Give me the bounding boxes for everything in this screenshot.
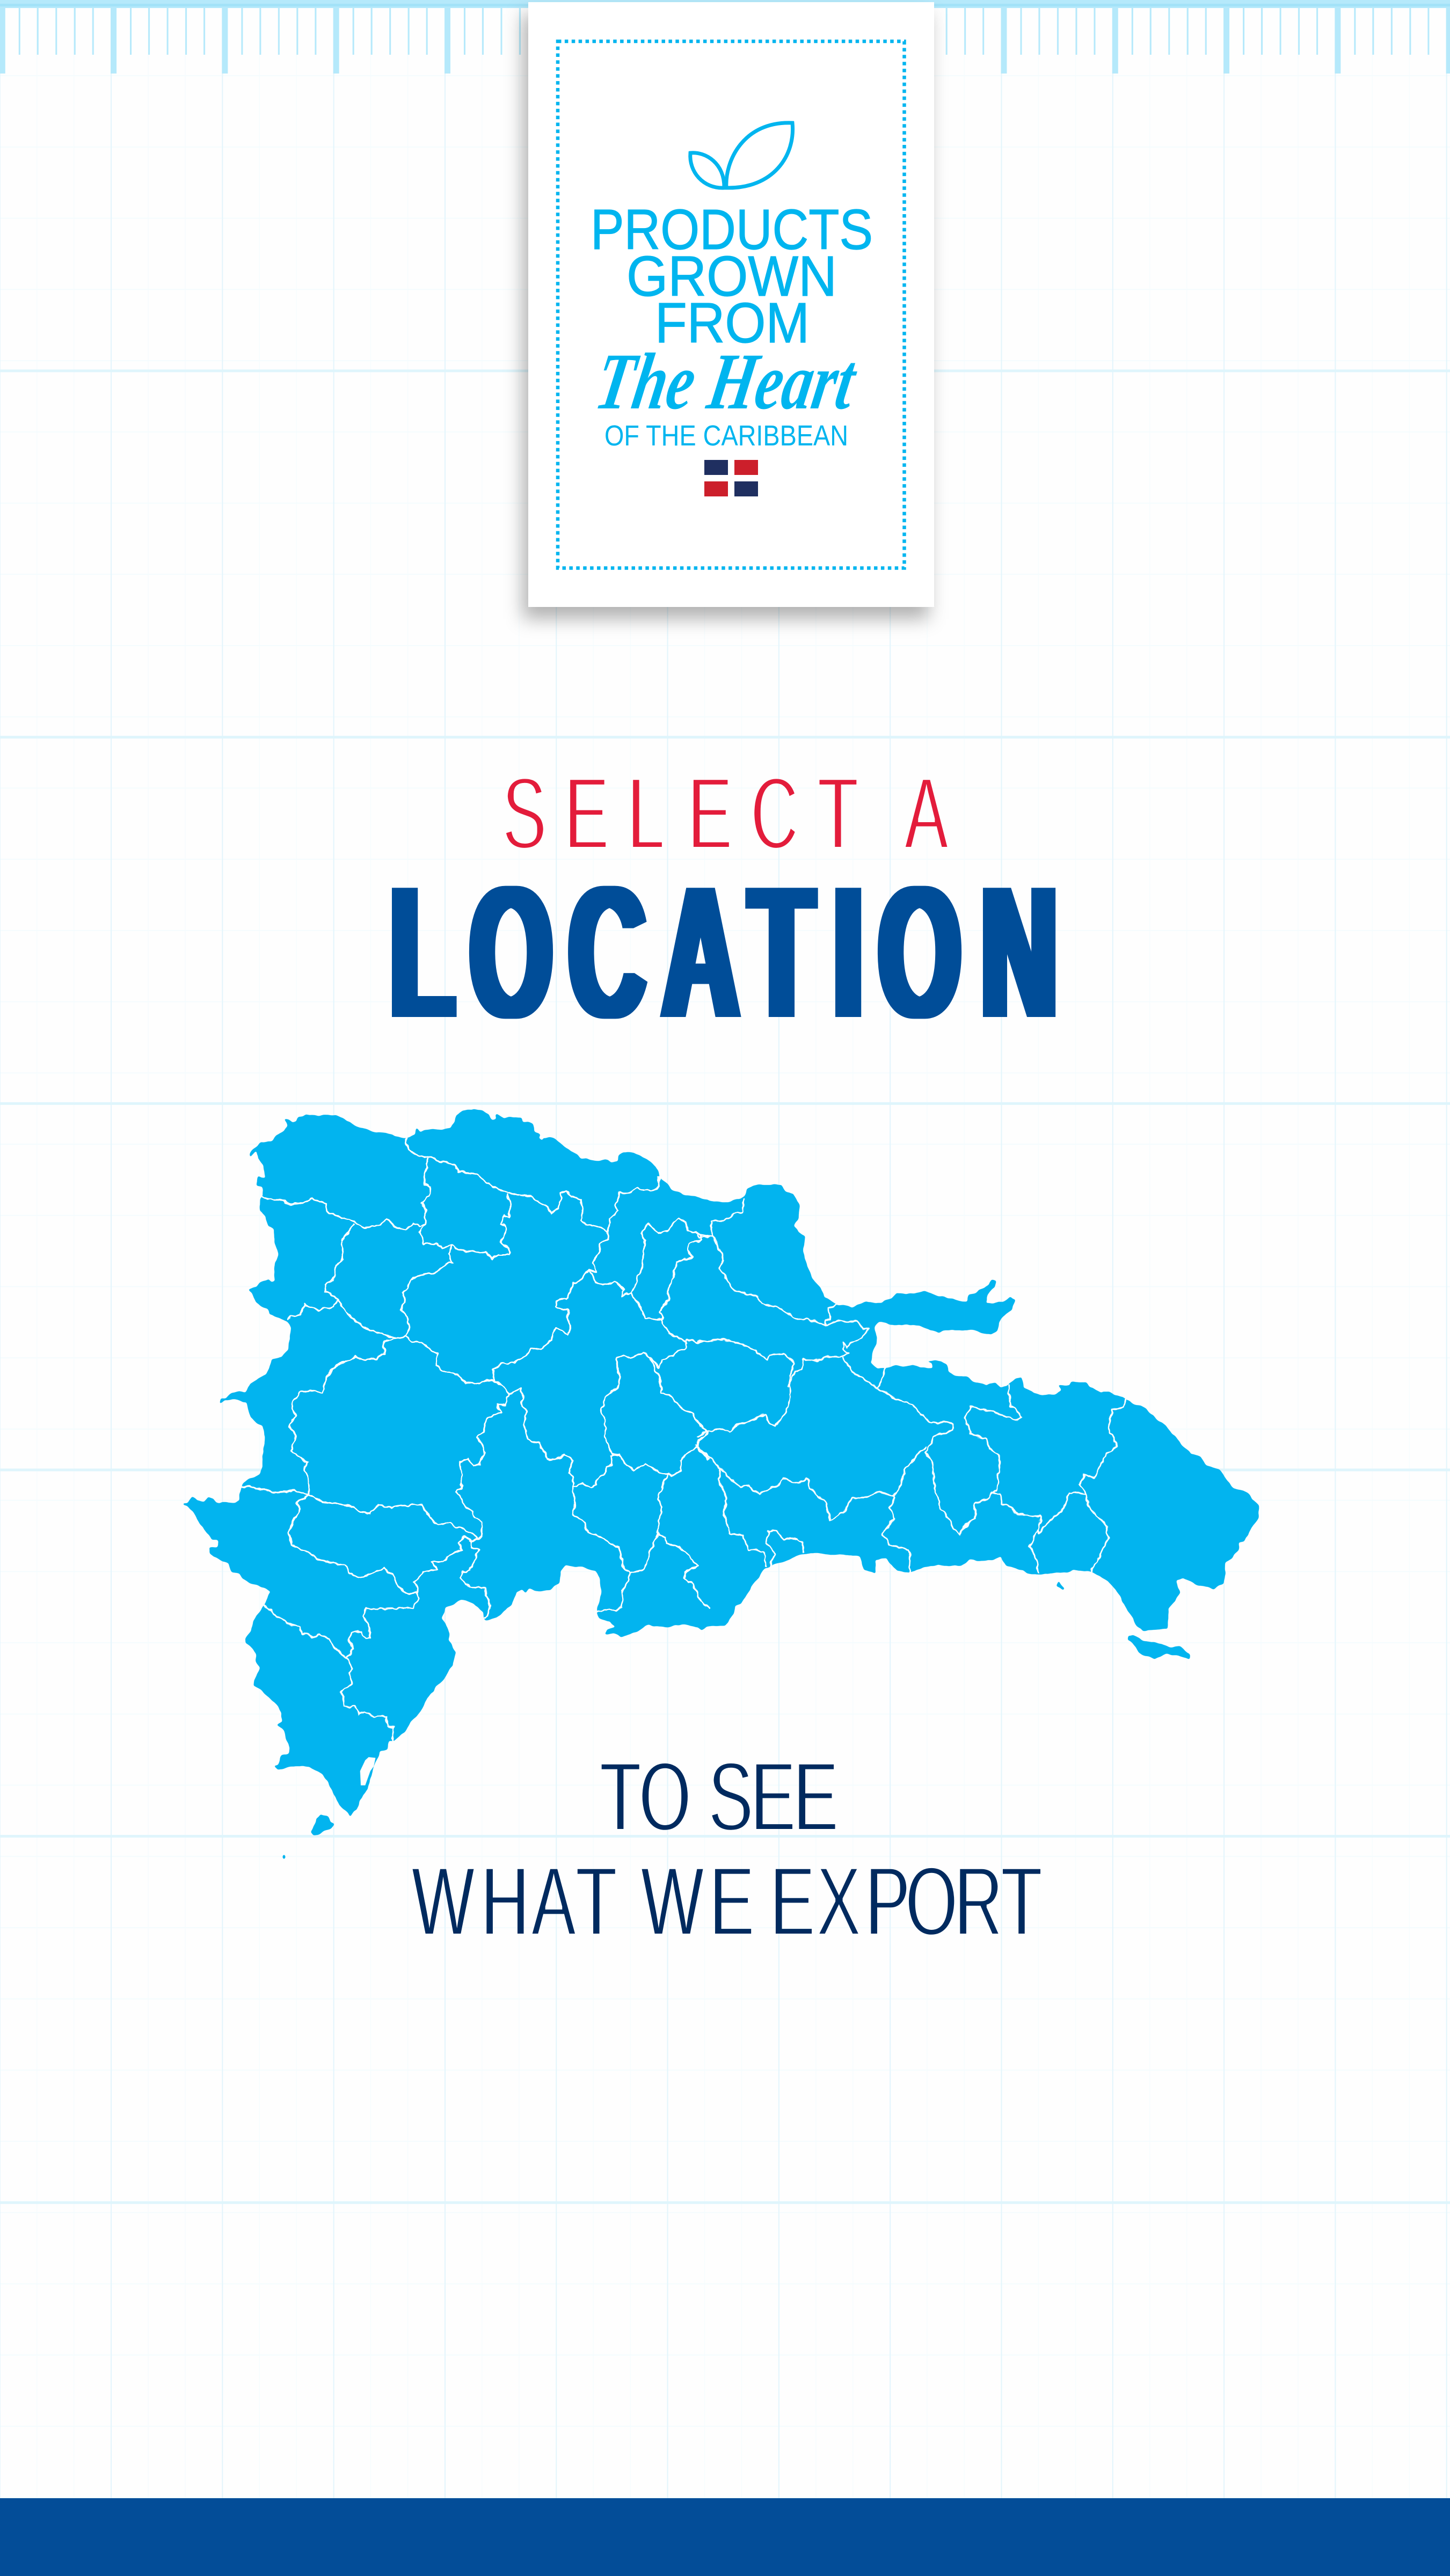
island: Alto Velo bbox=[282, 1855, 286, 1859]
icon: Dominican flag bbox=[704, 460, 758, 496]
logo text: products grown from: PRODUCTS bbox=[591, 198, 873, 261]
land masses bbox=[181, 1109, 1259, 1836]
text: to see: TO SEE bbox=[600, 1742, 838, 1851]
province borders bbox=[241, 1139, 1125, 1741]
logo text: products grown from: FROM bbox=[655, 291, 810, 355]
logo script: The Heart: The Heart bbox=[589, 336, 864, 426]
heading: location: LOCATION bbox=[390, 847, 1057, 1057]
land: south-west peninsula bbox=[182, 1503, 709, 1817]
island: Beata bbox=[311, 1814, 335, 1836]
footer bar bbox=[0, 2498, 1450, 2576]
island: Saona bbox=[1127, 1635, 1189, 1660]
inlet near Barahona bbox=[360, 1757, 375, 1785]
ruler ticks along the top edge bbox=[0, 0, 1450, 75]
text: what we export: WHAT WE EXPORT bbox=[412, 1847, 1042, 1956]
land: east bbox=[698, 1184, 1259, 1631]
island: Catalina bbox=[1055, 1580, 1065, 1591]
land: north and west bbox=[181, 1109, 709, 1540]
province borders: south-west bbox=[264, 1592, 418, 1741]
logo text: products grown from: GROWN bbox=[626, 245, 837, 308]
logo text: products grown from bbox=[591, 198, 873, 355]
dotted frame bbox=[558, 41, 904, 568]
icon: two leaves bbox=[690, 123, 793, 188]
province borders: west bbox=[241, 1139, 709, 1617]
logo text: of the Caribbean: OF THE CARIBBEAN bbox=[604, 420, 848, 452]
heading: select a: SELECT A bbox=[502, 756, 949, 870]
province borders: east bbox=[698, 1198, 1125, 1573]
panel: hanging paper label bbox=[523, 2, 934, 619]
map: Dominican Republic provinces bbox=[181, 1109, 1259, 1859]
